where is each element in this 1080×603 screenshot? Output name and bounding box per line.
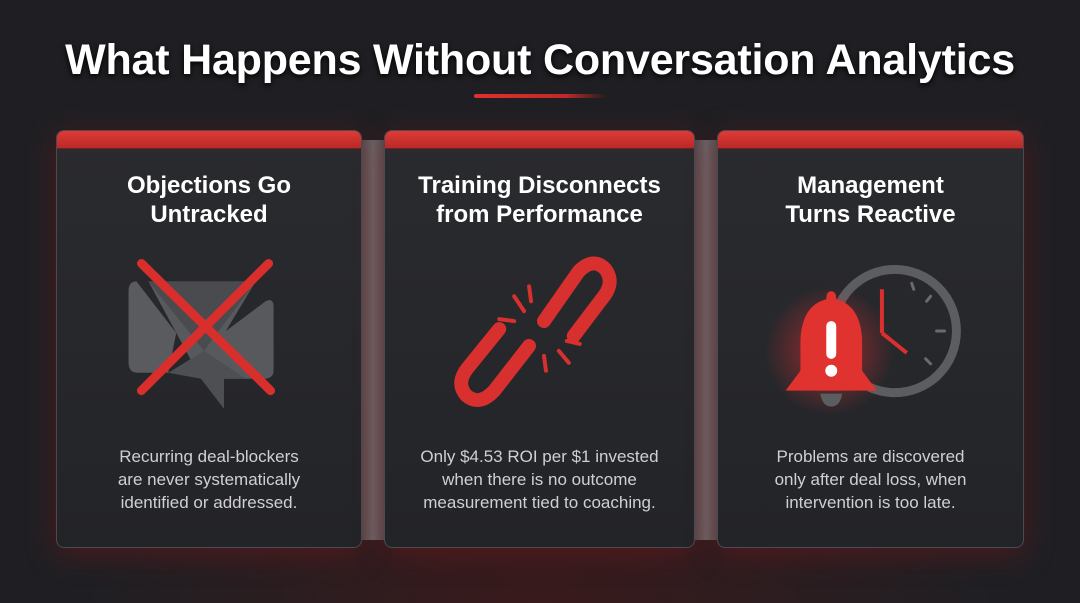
text: training <box>420 447 659 512</box>
icon: bell and clock <box>770 265 961 411</box>
text: objections: Recurring deal-blockers <box>119 447 299 466</box>
title: What Happens Without Conversation Analytics <box>65 36 1015 84</box>
text: training: measurement tied to coaching. <box>423 493 656 512</box>
heading: training <box>418 172 661 228</box>
heading: management: Turns Reactive <box>785 201 956 228</box>
heading: management: Management <box>797 172 944 199</box>
text: objections: identified or addressed. <box>121 493 297 512</box>
heading: management <box>785 172 956 228</box>
icon: crossed chat <box>128 259 276 408</box>
heading: training: from Performance <box>436 201 643 228</box>
text: objections: are never systematically <box>118 470 300 489</box>
panel: management <box>717 130 1024 548</box>
text: management <box>775 447 966 512</box>
text: training: when there is no outcome <box>442 470 637 489</box>
text: management: Problems are discovered <box>776 447 965 466</box>
heading: objections: Untracked <box>150 201 268 228</box>
text: training: Only $4.53 ROI per $1 invested <box>420 447 659 466</box>
heading: objections <box>127 172 291 228</box>
icon: broken chain <box>454 256 617 407</box>
text: objections <box>118 447 300 512</box>
text: management: intervention is too late. <box>785 493 956 512</box>
panel: training <box>384 130 695 548</box>
heading: training: Training Disconnects <box>418 172 661 199</box>
panel: objections <box>56 130 362 548</box>
heading: objections: Objections Go <box>127 172 291 199</box>
text: management: only after deal loss, when <box>775 470 966 489</box>
